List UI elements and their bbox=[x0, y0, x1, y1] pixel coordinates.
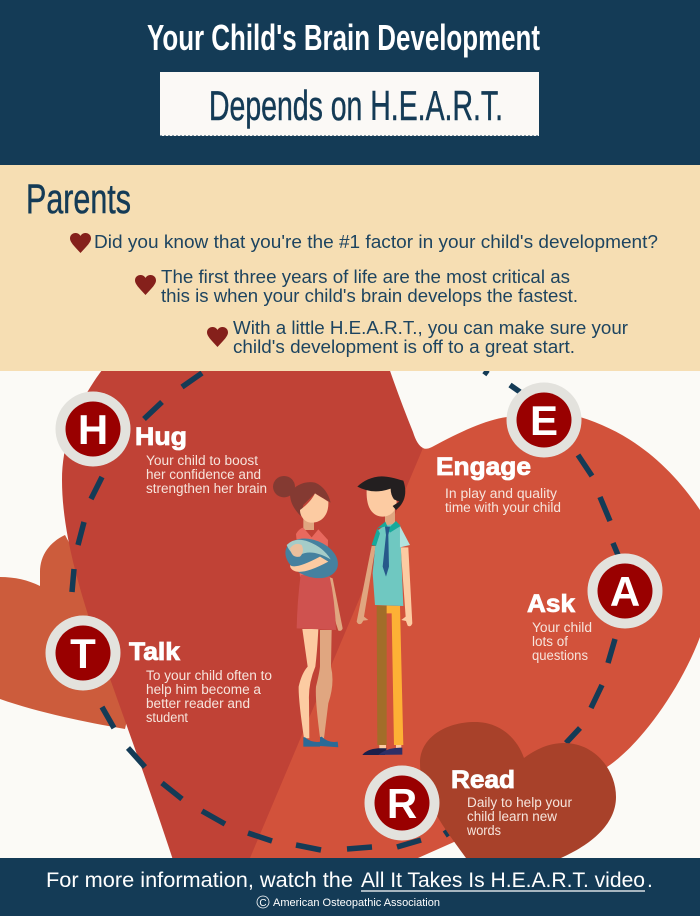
text: fact two: The first three years of life are the most critical as bbox=[161, 266, 570, 287]
text: fact two bbox=[161, 266, 578, 306]
badge: R bbox=[364, 766, 440, 840]
icon: heart 2 bbox=[135, 275, 156, 295]
badge: A: A bbox=[610, 568, 640, 615]
badge: H: H bbox=[78, 406, 108, 453]
panel: parents intro bbox=[0, 165, 700, 371]
badge: R: R bbox=[387, 780, 417, 827]
illustration: father bbox=[357, 476, 412, 755]
section: Read: child learn new bbox=[467, 809, 557, 824]
badge: T: T bbox=[70, 630, 96, 677]
section: Read: words bbox=[466, 823, 501, 838]
footer band bbox=[0, 858, 700, 916]
small background heart bbox=[0, 535, 127, 729]
subtitle banner: Depends on H.E.A.R.T. bbox=[209, 82, 503, 129]
footer call to action: . bbox=[647, 869, 653, 892]
subtitle banner bbox=[160, 72, 539, 136]
title: Your Child's Brain Development bbox=[147, 17, 540, 58]
section: Read: Daily to help your bbox=[467, 795, 572, 810]
section: Engage bbox=[436, 453, 561, 515]
large right heart bbox=[250, 412, 700, 858]
text: fact three bbox=[233, 317, 628, 357]
dashed path ring bbox=[72, 371, 618, 850]
section: Ask: questions bbox=[532, 648, 588, 663]
section: Ask: lots of bbox=[532, 634, 568, 649]
section: Talk bbox=[129, 638, 272, 725]
section: Engage: time with your child bbox=[445, 500, 561, 515]
heading: Parents: Parents bbox=[26, 175, 131, 222]
section: Read: Read bbox=[451, 766, 515, 794]
section: Ask bbox=[527, 590, 592, 663]
badge: H bbox=[56, 392, 130, 466]
footer call to action bbox=[46, 869, 653, 892]
section: Engage: Engage bbox=[436, 453, 531, 481]
text: fact two: this is when your child's brain develops the fastest. bbox=[161, 285, 578, 306]
copyright line: C bbox=[259, 898, 267, 909]
header band bbox=[0, 0, 700, 165]
badge: E: E bbox=[530, 397, 558, 444]
section: Engage: In play and quality bbox=[445, 486, 557, 501]
badge: T bbox=[46, 616, 120, 690]
copyright line: American Osteopathic Association bbox=[273, 897, 440, 909]
section: Talk: help him become a bbox=[146, 682, 261, 697]
text: fact one: Did you know that you're the #1 factor in your child's development? bbox=[94, 231, 658, 252]
section: Ask: Your child bbox=[532, 620, 592, 635]
footer call to action: All It Takes Is H.E.A.R.T. video bbox=[361, 869, 645, 892]
text: fact three: child's development is off to a great start. bbox=[233, 336, 575, 357]
section: Read bbox=[451, 766, 572, 838]
badge: A bbox=[588, 554, 662, 628]
section: Talk: To your child often to bbox=[146, 668, 272, 683]
section: Talk: Talk bbox=[129, 638, 180, 666]
section: Hug: strengthen her brain bbox=[146, 481, 267, 496]
icon: heart 1 bbox=[70, 233, 91, 253]
section: Talk: better reader and bbox=[146, 696, 250, 711]
section: Ask: Ask bbox=[527, 590, 575, 618]
section: Hug: Your child to boost bbox=[146, 453, 258, 468]
icon: heart 3 bbox=[207, 327, 228, 347]
footer call to action: For more information, watch the bbox=[46, 869, 353, 892]
badge: E bbox=[506, 382, 582, 458]
section: Hug: her confidence and bbox=[146, 467, 261, 482]
section: Hug: Hug bbox=[135, 423, 187, 451]
dark heart behind Read bbox=[420, 722, 616, 858]
large left heart bbox=[62, 365, 423, 860]
section: Hug bbox=[135, 423, 267, 496]
illustration: mother holding baby bbox=[273, 476, 344, 747]
section: Talk: student bbox=[146, 710, 188, 725]
text: fact three: With a little H.E.A.R.T., you can make sure your bbox=[233, 317, 628, 338]
